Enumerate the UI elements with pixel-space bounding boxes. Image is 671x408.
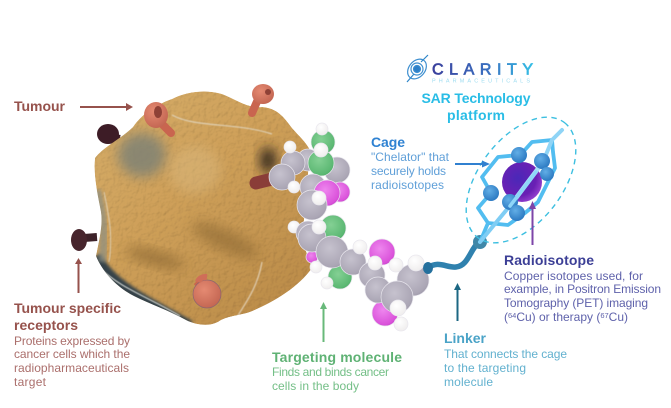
text: Tumour specific receptors: receptors <box>14 317 78 333</box>
text: Targeting molecule: Finds and binds cancer <box>272 365 389 379</box>
text: Radioisotope: Cu) <box>609 310 628 324</box>
dashed ellipse <box>444 97 598 263</box>
heading: SAR Technology platform: SAR Technology <box>422 90 531 106</box>
text: Targeting molecule: Targeting molecule <box>272 349 402 365</box>
text: Radioisotope: Tomography (PET) imaging <box>504 296 648 310</box>
targeting molecule <box>269 123 429 331</box>
receptor: dark rear <box>97 124 120 144</box>
text: Tumour specific receptors: radiopharmaceuticals <box>14 361 129 375</box>
text: Radioisotope: ( <box>504 310 508 324</box>
arrow: cage <box>455 160 490 168</box>
text: Tumour specific receptors: Tumour specific <box>14 300 121 316</box>
receptor: top left <box>144 102 171 133</box>
receptors <box>71 84 284 308</box>
text: Cage: securely holds <box>371 164 446 178</box>
text: Tumour specific receptors: target <box>14 375 47 389</box>
heading: SAR Technology platform: platform <box>447 107 505 123</box>
arrow: Tumour <box>80 103 133 111</box>
receptor: bottom <box>193 277 221 308</box>
cage with radioisotope <box>444 97 598 263</box>
text: Tumour specific receptors: cancer cells which the <box>14 347 130 361</box>
receptor: binding site <box>256 176 284 183</box>
cage nodes <box>483 147 554 221</box>
tumour cell <box>95 92 312 326</box>
text: Targeting molecule <box>272 349 402 393</box>
text: Radioisotope: example, in Positron Emission <box>504 282 661 296</box>
text: Linker <box>444 330 567 389</box>
text: Cage: "Chelator" that <box>371 150 450 164</box>
heading: SAR Technology platform <box>422 90 531 123</box>
receptor: left <box>71 229 97 251</box>
linker <box>423 235 487 274</box>
text: Cage <box>371 134 450 192</box>
arrow: radioisotope <box>529 201 536 245</box>
receptor: top <box>252 84 274 113</box>
text: Radioisotope: Copper isotopes used, for <box>504 269 643 283</box>
text: Radioisotope: 67 <box>600 311 609 320</box>
text: Tumour specific receptors <box>14 300 130 389</box>
arrow: targeting molecule <box>320 302 327 342</box>
text: Radioisotope: 64 <box>508 311 516 320</box>
text: Radioisotope: Radioisotope <box>504 252 594 268</box>
text: Linker: That connects the cage <box>444 347 567 361</box>
text: Linker: Linker <box>444 330 487 346</box>
label: Tumour: Tumour <box>14 98 66 114</box>
text: Radioisotope: Cu) or therapy ( <box>516 310 600 324</box>
text: Linker: molecule <box>444 375 493 389</box>
text: Cage: radioisotopes <box>371 178 444 192</box>
logo icon <box>404 55 430 83</box>
cage bonds <box>478 130 562 242</box>
logo subtitle: PHARMACEUTICALS <box>432 78 530 84</box>
arrow: linker <box>454 283 461 321</box>
radioisotope sphere <box>502 162 542 202</box>
clarity logo <box>404 55 533 84</box>
text: Targeting molecule: cells in the body <box>272 379 359 393</box>
text: Tumour specific receptors: Proteins expressed by <box>14 334 130 348</box>
text: Radioisotope <box>504 252 661 324</box>
arrow: receptors <box>75 258 82 293</box>
text: Cage: Cage <box>371 134 405 150</box>
text: Linker: to the targeting <box>444 361 526 375</box>
logo wordmark: CLARITY <box>432 62 533 78</box>
